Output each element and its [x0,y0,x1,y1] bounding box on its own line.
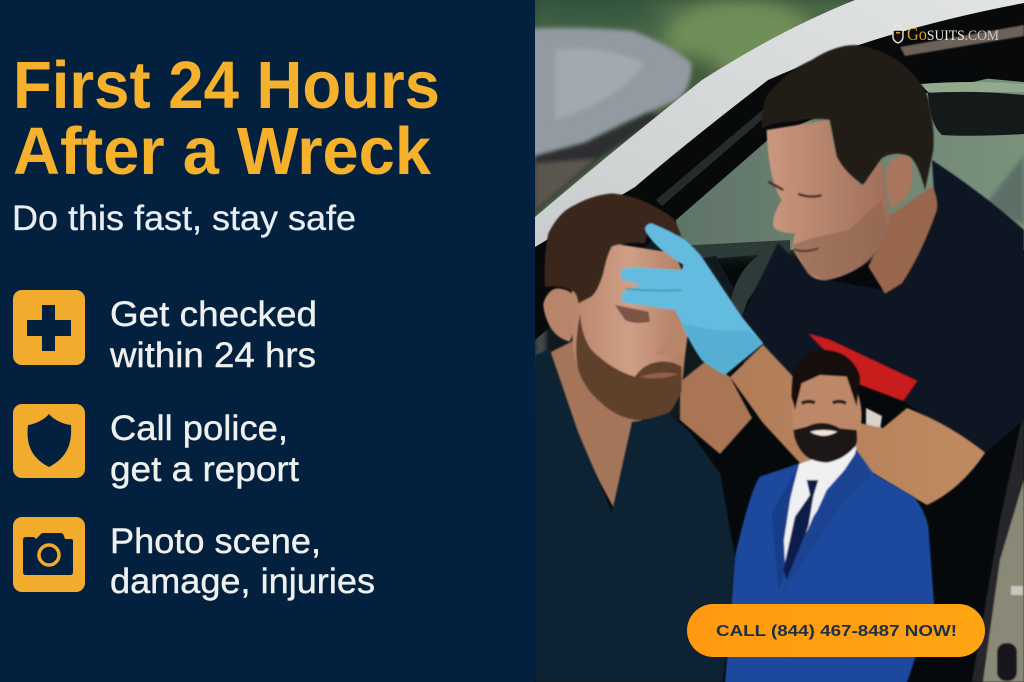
paramedic polo shirt [740,160,1024,454]
step 3 text: Photo scene, [110,522,321,561]
logo wordmark: GoSUITS.COM [907,24,999,44]
step 1: get checked [13,290,317,375]
icon: padlock shield [893,25,903,43]
icon: medical cross [13,290,85,365]
lapels [780,452,872,597]
paramedic in dark polo [680,45,1024,505]
ear [543,288,575,342]
title: First 24 Hours [13,48,440,123]
door frame with white pillar [535,0,1024,340]
neck [542,340,642,510]
badge [866,408,882,430]
step 1 text: within 24 hrs [109,336,316,375]
subtitle: Do this fast, stay safe [12,199,356,238]
call to action button: CALL (844) 467-8487 NOW! [716,623,957,640]
panel: left navy background with text [0,0,535,682]
attorney portrait [725,350,934,682]
paramedic arms [680,345,985,505]
step 2: call police [13,404,299,489]
beard [576,313,682,420]
blurred foliage background [520,0,865,250]
icon: blue glove [620,223,763,375]
step 2 text: get a report [110,450,299,489]
rear view mirror [928,92,1024,136]
attorney suit [725,450,934,682]
attorney head [792,370,862,462]
logo: GoSuits.com [893,24,999,44]
panel: accident scene photo illustration [520,0,1024,682]
car interior [535,220,773,420]
attorney hair [792,350,860,410]
attorney tie [783,480,818,580]
car window glass [676,70,1024,262]
step 2 text: Call police, [110,409,288,448]
injured man with head in hand [542,193,763,510]
red stripe [809,334,917,401]
step 3 text: damage, injuries [110,562,375,601]
injured man torso [535,350,735,682]
icon: shield [13,404,85,478]
step 1 text: Get checked [110,295,317,334]
title: After a Wreck [13,114,432,189]
step 3: photo scene [13,517,375,601]
lips [640,372,678,378]
injured man head [571,240,688,420]
lower door panel [972,410,1024,682]
seat [731,254,773,317]
attorney shirt [783,447,857,563]
hair [545,193,682,303]
call to action button [687,604,985,657]
paramedic face and neck [762,45,937,293]
title [13,48,440,189]
nose shadow [656,350,661,354]
crashed car hood [525,28,692,213]
attorney beard [793,423,857,463]
icon: camera [13,517,85,592]
